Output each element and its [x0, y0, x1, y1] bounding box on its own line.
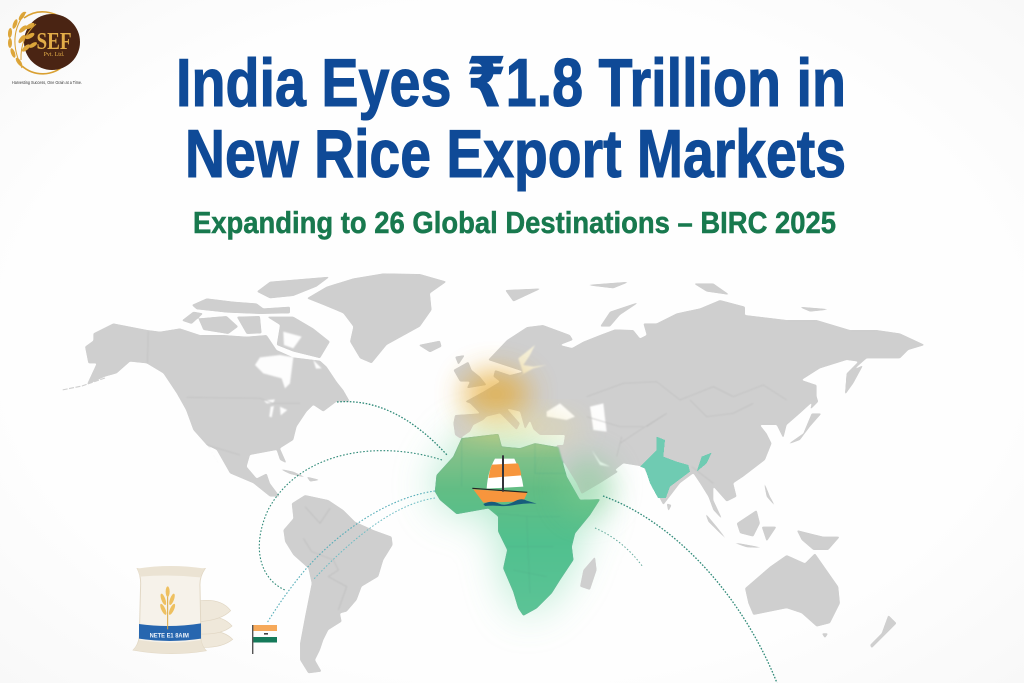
title: India Eyes ₹1.8 Trillion in: [176, 45, 846, 121]
icon: ship: [472, 455, 537, 506]
icon: rice sacks: [133, 566, 233, 653]
map: South America: [283, 495, 393, 673]
glow behind Africa: [435, 434, 600, 615]
map: Madagascar: [580, 557, 597, 590]
highlight: India: [640, 437, 712, 505]
arc: East Africa short: [595, 528, 643, 567]
logo: SEF Pvt. Ltd.: [8, 11, 82, 85]
wheat emblem: [159, 586, 176, 629]
map: Aleutian islands: [62, 378, 105, 390]
icon: wheat ears: [8, 11, 38, 67]
world map: [62, 273, 925, 673]
map: Eurasia: [453, 282, 925, 648]
arc: East Africa to south east: [603, 496, 777, 683]
small stacked sacks: [200, 600, 233, 647]
blue label band: [139, 623, 201, 641]
map: North America: [85, 273, 447, 497]
route arcs: [259, 402, 777, 683]
title: New Rice Export Markets: [185, 116, 846, 192]
highlight: Europe amber glow: [458, 370, 614, 516]
subtitle: Expanding to 26 Global Destinations – BIRC 2025: [193, 205, 836, 240]
logo: SEF Pvt. Ltd.: Harvesting Success, One Grain at a Time.: [12, 80, 82, 85]
arc: flag to Africa: [267, 491, 435, 623]
title: [176, 45, 846, 192]
land masses: [85, 273, 925, 673]
arc: South America to Africa: [313, 498, 435, 580]
arc: Africa to North America: [337, 402, 447, 455]
main sack: [133, 569, 206, 653]
logo: SEF Pvt. Ltd.: Pvt. Ltd.: [44, 52, 65, 58]
arc: Africa to Central and South America: [259, 451, 442, 590]
map: Africa: [435, 434, 600, 616]
icon: Indian flag: [252, 625, 277, 654]
icon: rice sacks: NETE E1 8AIM: [150, 632, 189, 639]
logo: SEF Pvt. Ltd.: SEF: [36, 29, 72, 55]
